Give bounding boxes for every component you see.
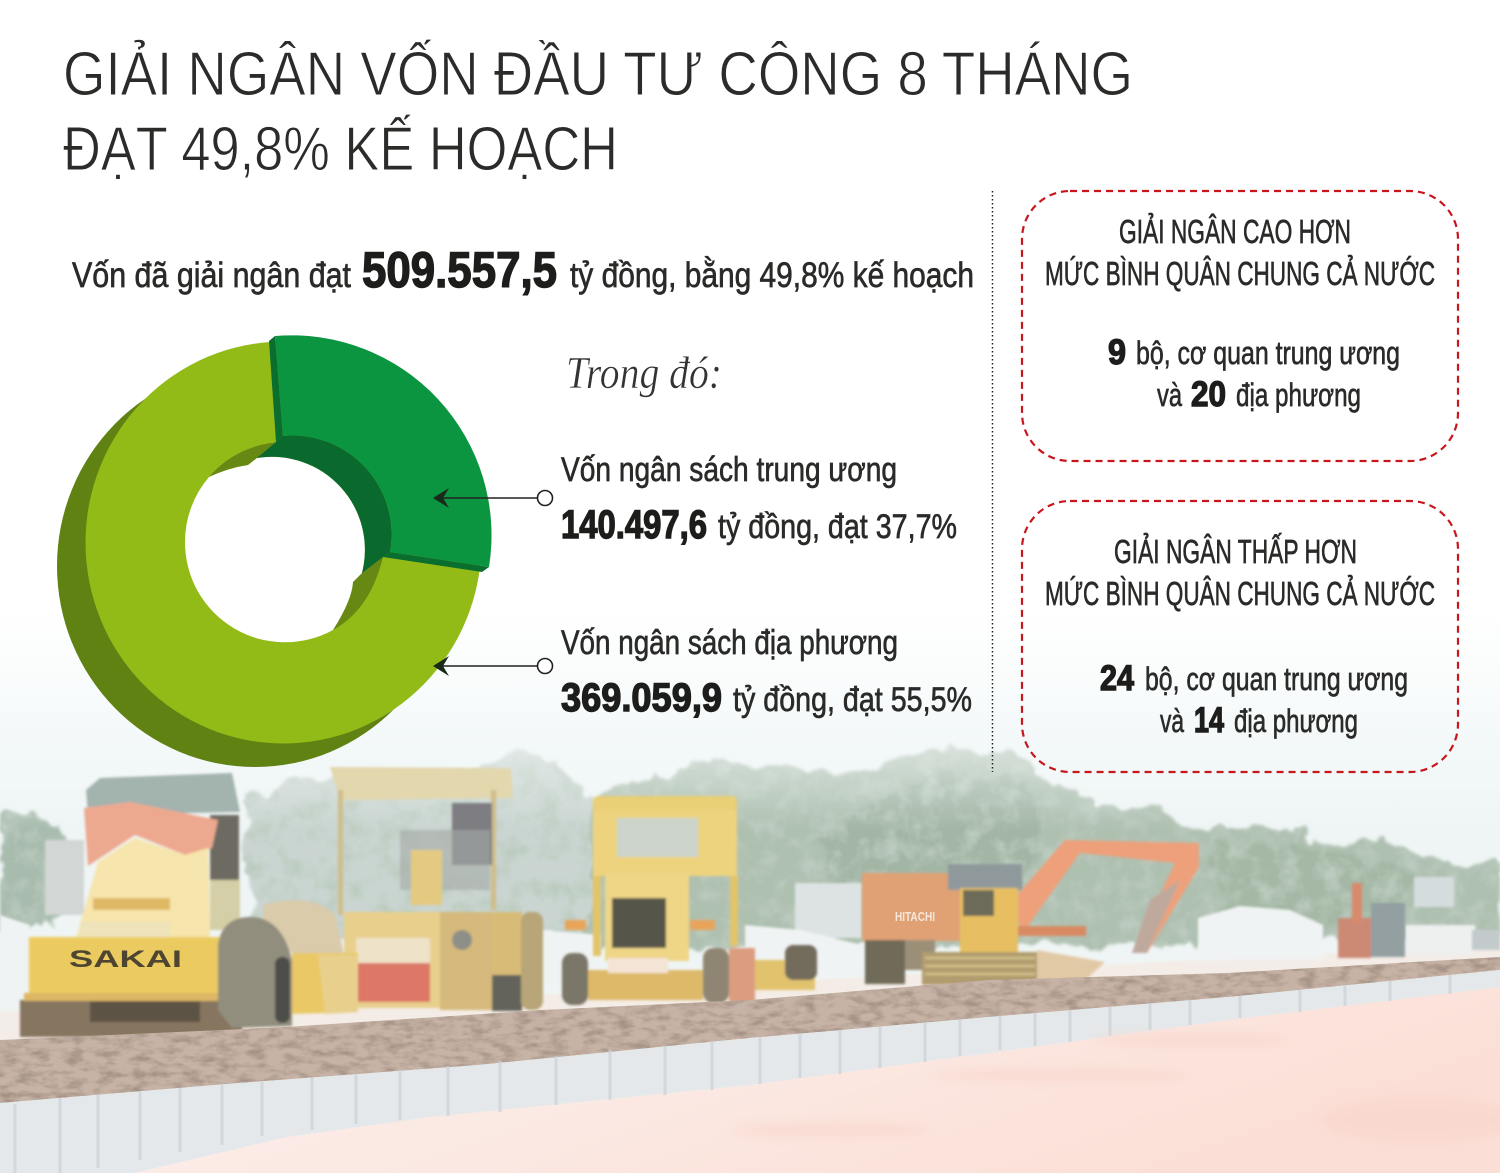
text block: local budget — [561, 624, 972, 720]
headline statistic — [72, 242, 974, 298]
panel: higher than national average: địa phương — [1236, 377, 1361, 413]
panel: higher than national average: 20 — [1191, 375, 1226, 414]
panel: lower than national average: GIẢI NGÂN THẤP HƠN — [1114, 533, 1357, 570]
road shading — [730, 1033, 1500, 1144]
text block: local budget: tỷ đồng, đạt 55,5% — [733, 681, 972, 719]
excavator lettering: HITACHI — [895, 909, 935, 924]
panel: lower than national average: và — [1160, 703, 1184, 739]
hole — [185, 457, 365, 642]
far ground — [0, 945, 1500, 1045]
excavator — [862, 840, 1199, 985]
distant machine — [1338, 883, 1500, 958]
3D donut chart — [57, 335, 492, 767]
central budget value: 140.497,6 — [561, 503, 707, 547]
headline statistic: Vốn đã giải ngân đạt — [72, 256, 351, 295]
text block: local budget: Vốn ngân sách địa phương — [561, 624, 898, 662]
dirt verge — [0, 957, 1500, 1103]
inner wall of ring — [209, 442, 383, 630]
upper haze over trees — [0, 700, 1500, 830]
extruded back of ring — [57, 365, 453, 767]
panel: lower than national average — [1022, 501, 1458, 772]
text block: central budget — [561, 451, 957, 547]
machine lettering: SAKAI — [69, 946, 182, 973]
concrete curb — [0, 970, 1500, 1173]
local budget value: 369.059,9 — [561, 676, 722, 720]
headline statistic: tỷ đồng, bằng 49,8% kế hoạch — [570, 256, 974, 295]
light green segment: local budget — [86, 342, 482, 744]
SAKAI roller — [20, 773, 358, 1037]
title line 2: ĐẠT 49,8% KẾ HOẠCH — [63, 115, 618, 184]
panel: higher than national average: bộ, cơ quan trung ương — [1136, 335, 1400, 371]
road — [134, 987, 1500, 1173]
panel: lower than national average: 24 — [1100, 659, 1134, 698]
white pipes and walls — [0, 877, 1475, 1012]
panel: lower than national average: địa phương — [1234, 703, 1358, 739]
pointer: local budget — [433, 656, 552, 676]
title — [63, 40, 1133, 184]
panel: lower than national average: bộ, cơ quan trung ương — [1145, 661, 1408, 697]
dark inner wall: central budget — [257, 436, 392, 573]
segment side strips — [269, 336, 489, 572]
pointer: central budget — [433, 488, 552, 508]
total value: 509.557,5 — [362, 242, 557, 298]
panel: lower than national average: 14 — [1194, 701, 1224, 740]
curb slats — [15, 975, 1450, 1173]
grader — [562, 796, 817, 1005]
panel: higher than national average — [1022, 191, 1458, 461]
panel: higher than national average: 9 — [1108, 333, 1126, 372]
script label: Trong đó: — [566, 347, 722, 398]
panel: higher than national average: GIẢI NGÂN CAO HƠN — [1119, 213, 1351, 250]
panel: higher than national average: và — [1157, 377, 1182, 413]
background photo: construction site — [0, 700, 1500, 1173]
title line 1: GIẢI NGÂN VỐN ĐẦU TƯ CÔNG 8 THÁNG — [63, 40, 1133, 109]
text block: central budget: tỷ đồng, đạt 37,7% — [718, 508, 957, 546]
text block: central budget: Vốn ngân sách trung ương — [561, 451, 897, 489]
dark green segment: central budget — [275, 335, 492, 567]
middle roller with canopy — [330, 767, 543, 1011]
tree line — [0, 746, 1500, 950]
